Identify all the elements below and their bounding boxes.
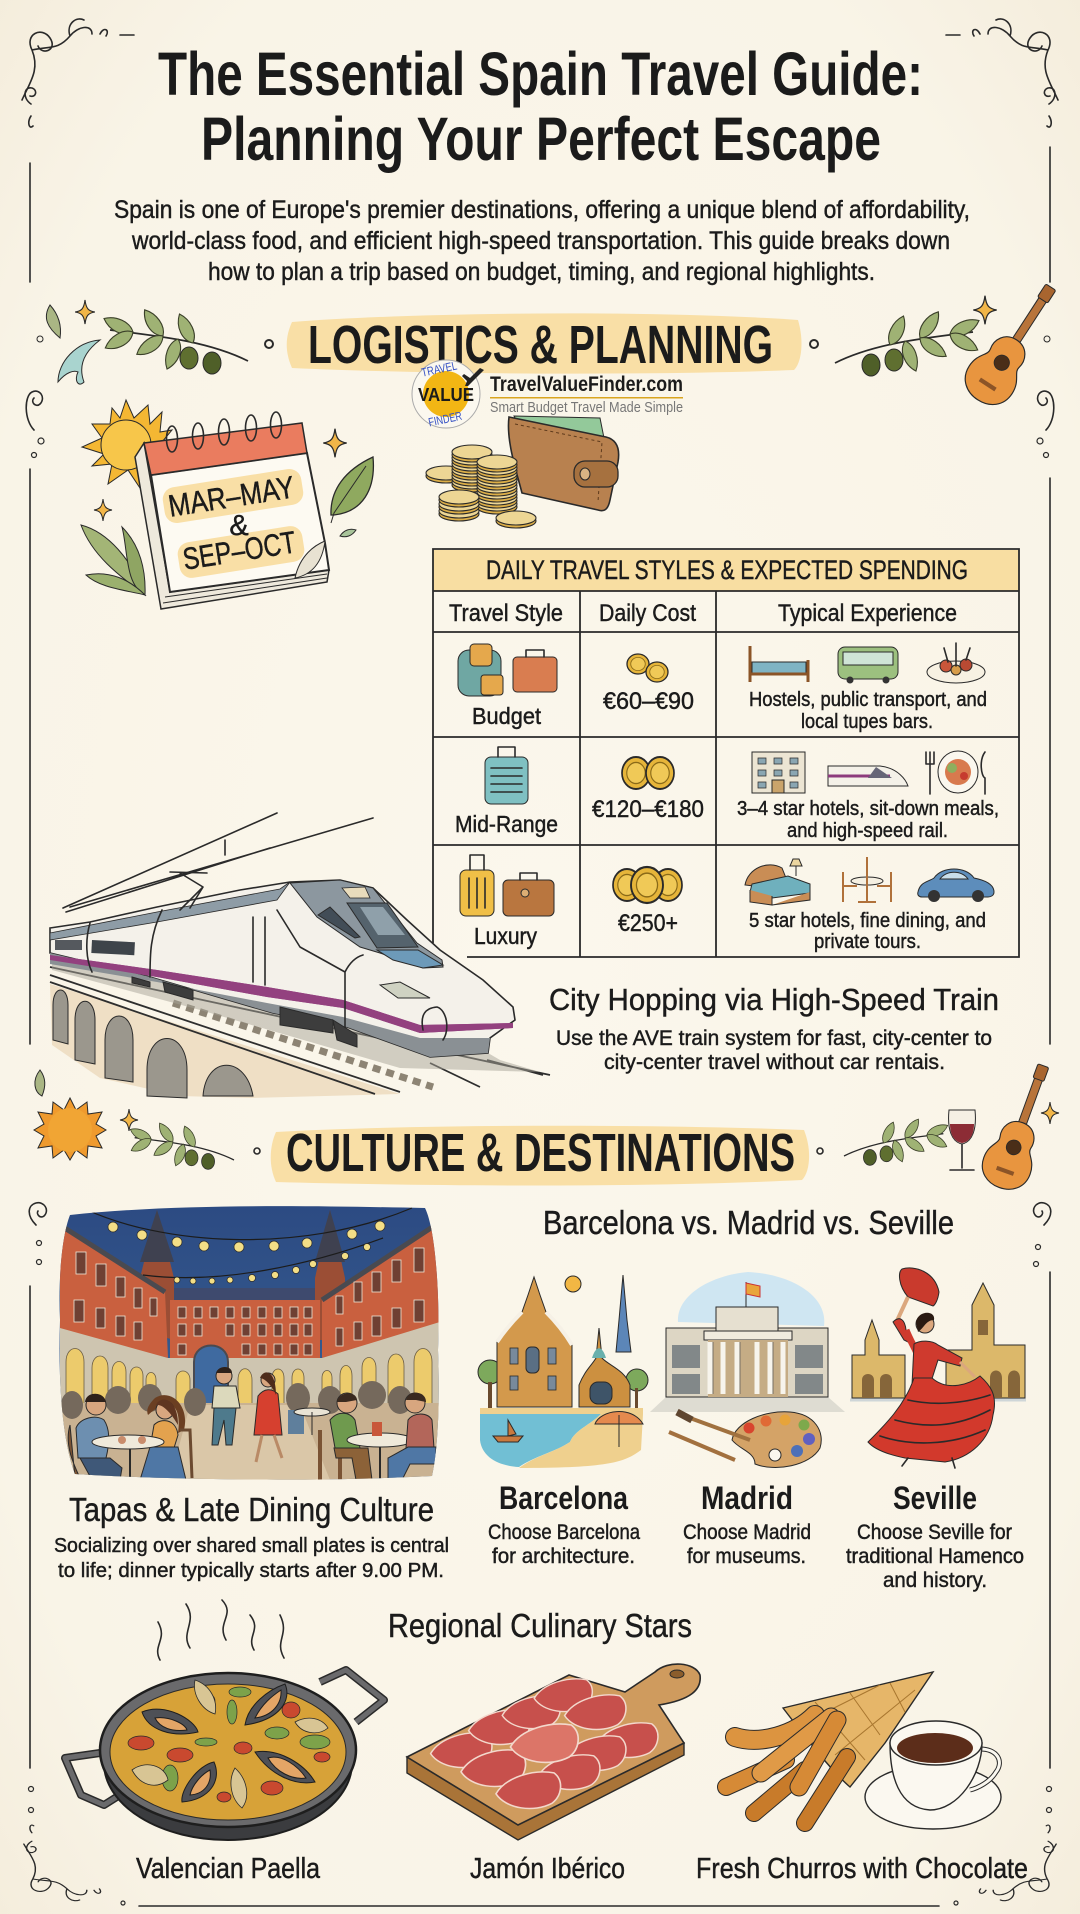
table row: mid-range: and high-speed rail.: [787, 820, 948, 842]
title: [158, 40, 923, 173]
table row: mid-range: 3–4 star hotels, sit-down meals,: [737, 798, 999, 820]
logo: TravelValueFinder: [412, 358, 683, 429]
text: city hopping via high-speed train: Use the AVE train system for fast, city-center to: [556, 1027, 992, 1050]
illustration: calendar with sun and leaves: &: [229, 510, 249, 542]
illustration: jamon iberico on board: [407, 1664, 700, 1840]
table header row: Travel Style: [449, 600, 563, 627]
text: barcelona: Barcelona: [499, 1480, 628, 1516]
text: barcelona: for architecture.: [492, 1545, 635, 1568]
text: tapas and late dining culture: Tapas & Late Dining Culture: [69, 1491, 434, 1528]
section heading: culture and destinations: [271, 1123, 809, 1186]
table row: luxury: Luxury: [474, 923, 537, 949]
logo: TravelValueFinder: TRAVEL: [420, 358, 458, 380]
table row: budget: local tupes bars.: [801, 711, 933, 733]
illustration: wallet and coin stacks: [426, 416, 619, 528]
text: seville: traditional Hamenco: [846, 1545, 1024, 1568]
text: city hopping via high-speed train: [549, 982, 999, 1074]
illustration: plaza evening tapas scene: [55, 1200, 445, 1488]
table row: budget: €60–€90: [603, 688, 694, 715]
section heading: culture and destinations: CULTURE & DESTINATIONS: [286, 1123, 795, 1183]
illustration: seville flamenco dancer: [850, 1268, 1026, 1468]
section ornaments: culture left: [34, 1070, 260, 1169]
illustration: madrid: [650, 1272, 845, 1467]
table: daily travel styles and expected spending: [433, 549, 1019, 957]
heading: barcelona vs madrid vs seville: Barcelona vs. Madrid vs. Seville: [543, 1204, 954, 1241]
text: madrid: Choose Madrid: [683, 1521, 811, 1544]
text: madrid: for museums.: [687, 1545, 806, 1568]
logo: TravelValueFinder: VALUE: [418, 385, 474, 405]
illustration: high-speed train on viaduct: [50, 813, 550, 1098]
illustration: valencian paella: [65, 1600, 384, 1840]
text: barcelona: [488, 1480, 640, 1568]
illustration: calendar with sun and leaves: MAR–MAY: [166, 469, 297, 524]
logo: TravelValueFinder: TravelValueFinder.com: [490, 373, 683, 396]
table title band: [433, 550, 1019, 591]
table row: budget: [458, 643, 987, 733]
text: tapas and late dining culture: [54, 1491, 449, 1582]
section heading: logistics and planning: LOGISTICS & PLANNING: [308, 315, 773, 375]
text: seville: and history.: [883, 1569, 987, 1592]
text: madrid: [683, 1480, 811, 1568]
table row: mid-range: Mid-Range: [455, 811, 558, 837]
section ornaments: logistics right: [810, 273, 1072, 414]
label: valencian paella: Valencian Paella: [136, 1853, 321, 1885]
illustration: calendar with sun and leaves: SEP–OCT: [180, 524, 298, 577]
logo: TravelValueFinder: FINDER: [427, 409, 463, 429]
table header row: [449, 600, 957, 627]
logo: TravelValueFinder: Smart Budget Travel Made Simple: [490, 399, 683, 416]
illustration: barcelona: [478, 1275, 648, 1468]
table row: luxury: private tours.: [814, 931, 921, 953]
intro text: Spain is one of Europe's premier destinations, offering a unique blend of affordability,: [114, 196, 970, 224]
table header row: Typical Experience: [778, 600, 957, 627]
table row: luxury: €250+: [618, 910, 678, 937]
text: seville: Choose Seville for: [857, 1521, 1012, 1544]
label: jamon iberico: Jamón Ibérico: [470, 1853, 625, 1885]
text: seville: Seville: [893, 1480, 977, 1516]
text: city hopping via high-speed train: city-center travel without car rentais.: [604, 1051, 945, 1074]
illustration: fresh churros with chocolate: [726, 1672, 1001, 1829]
section ornaments: logistics left: [37, 300, 273, 384]
intro text: how to plan a trip based on budget, timing, and regional highlights.: [208, 258, 875, 286]
intro text: world-class food, and efficient high-speed transportation. This guide breaks down: [131, 227, 950, 255]
label: fresh churros with chocolate: Fresh Churros with Chocolate: [696, 1853, 1028, 1885]
intro text: [114, 196, 970, 286]
text: barcelona: Choose Barcelona: [488, 1521, 640, 1544]
section ornaments: culture right: [817, 1057, 1067, 1196]
text: tapas and late dining culture: Socializing over shared small plates is central: [54, 1535, 449, 1557]
table row: mid-range: €120–€180: [592, 796, 704, 823]
table row: budget: Budget: [472, 703, 542, 729]
table row: budget: Hostels, public transport, and: [749, 689, 987, 711]
text: tapas and late dining culture: to life; dinner typically starts after 9.00 PM.: [58, 1560, 444, 1582]
heading: regional culinary stars: Regional Culinary Stars: [388, 1607, 692, 1644]
text: seville: [846, 1480, 1024, 1592]
illustration: calendar with sun and leaves: [81, 400, 373, 609]
title: Planning Your Perfect Escape: [201, 105, 881, 173]
table row: luxury: 5 star hotels, fine dining, and: [749, 910, 986, 932]
table grid: [433, 549, 1019, 957]
text: madrid: Madrid: [701, 1480, 793, 1516]
table row: luxury: [460, 855, 994, 953]
text: city hopping via high-speed train: City Hopping via High-Speed Train: [549, 982, 999, 1017]
table row: mid-range: [455, 747, 999, 842]
table header row: Daily Cost: [599, 600, 696, 627]
